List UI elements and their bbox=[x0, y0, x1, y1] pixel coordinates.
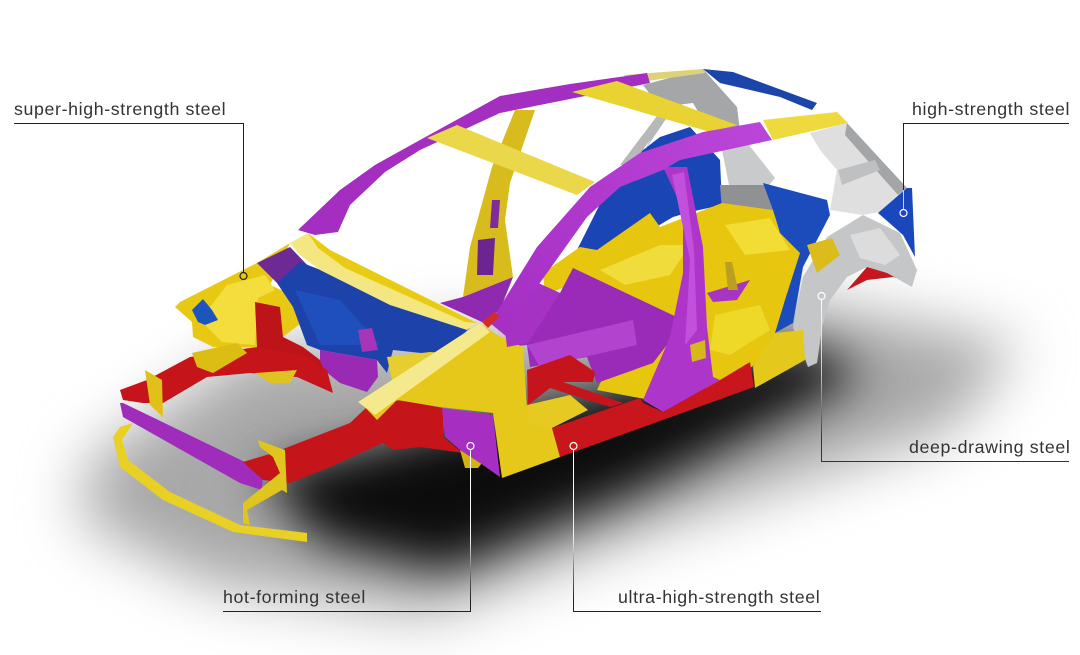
car body bbox=[113, 69, 917, 542]
blue roof rear bbox=[703, 69, 817, 110]
red clip bbox=[482, 312, 500, 328]
B pillar purple bbox=[643, 167, 720, 412]
label: ultra-high-strength steel: ultra-high-strength steel bbox=[618, 587, 820, 607]
far sill purple bbox=[440, 277, 513, 322]
purple firewall lower bbox=[320, 350, 378, 392]
front red frame bbox=[120, 347, 333, 403]
label: super-high-strength steel bbox=[14, 99, 247, 280]
rear sill yellow bbox=[753, 330, 805, 388]
red sill bbox=[552, 362, 754, 457]
upper rear grey panel bbox=[810, 123, 907, 215]
strut tower yellow bbox=[175, 243, 310, 347]
label: deep-drawing steel bbox=[818, 292, 1070, 462]
label: hot-forming steel bbox=[223, 442, 474, 612]
red strut tower bbox=[255, 302, 327, 380]
far roof rail purple bbox=[298, 73, 650, 235]
rear blue inner wall bbox=[763, 183, 830, 333]
front red longitudinal bbox=[243, 400, 463, 483]
rear quarter blue bbox=[878, 188, 915, 257]
foot yellow bbox=[460, 450, 482, 468]
purple seat bracket bbox=[707, 280, 750, 302]
rear yellow upper bar bbox=[763, 112, 848, 140]
blue firewall bbox=[277, 262, 470, 373]
yellow rear bracket bbox=[807, 238, 840, 273]
purple lower A pillar bbox=[503, 283, 560, 347]
yellow bumper beam bbox=[113, 423, 307, 542]
A pillar yellow panel bbox=[360, 323, 560, 478]
red under arch bbox=[847, 267, 913, 290]
yellow bump bbox=[387, 352, 445, 385]
main purple roof rail and A pillar bbox=[490, 122, 772, 337]
label: high-strength steel: high-strength steel bbox=[912, 99, 1070, 119]
yellow bumper bracket bbox=[243, 440, 287, 525]
far roof grey inner bbox=[643, 69, 740, 132]
red crossmember bbox=[527, 355, 623, 407]
front yellow cross bar bbox=[427, 125, 595, 195]
label: ultra-high-strength steel bbox=[570, 442, 821, 612]
purple foot bbox=[442, 408, 500, 477]
dark purple panel bbox=[257, 247, 312, 283]
label: super-high-strength steel: super-high-strength steel bbox=[14, 99, 226, 119]
strut blue clip bbox=[192, 299, 218, 325]
label: high-strength steel bbox=[900, 99, 1070, 216]
far B pillar yellow bbox=[463, 110, 535, 297]
front crash bar purple bbox=[120, 403, 263, 490]
rear wheelhouse blue bbox=[577, 127, 722, 250]
upper tunnel purple bbox=[503, 268, 683, 383]
inner yellow wedge bbox=[527, 395, 588, 428]
wheel arch grey bbox=[793, 215, 917, 367]
rear yellow cross bar bbox=[572, 81, 737, 132]
cabin floor yellow bbox=[543, 203, 803, 400]
ground shadow bbox=[80, 300, 1020, 615]
yellow brackets on frame bbox=[192, 343, 247, 373]
label: hot-forming steel: hot-forming steel bbox=[223, 587, 366, 607]
label: deep-drawing steel: deep-drawing steel bbox=[909, 437, 1070, 457]
far roof gold strip bbox=[623, 69, 705, 82]
windshield base beam bbox=[290, 233, 477, 330]
